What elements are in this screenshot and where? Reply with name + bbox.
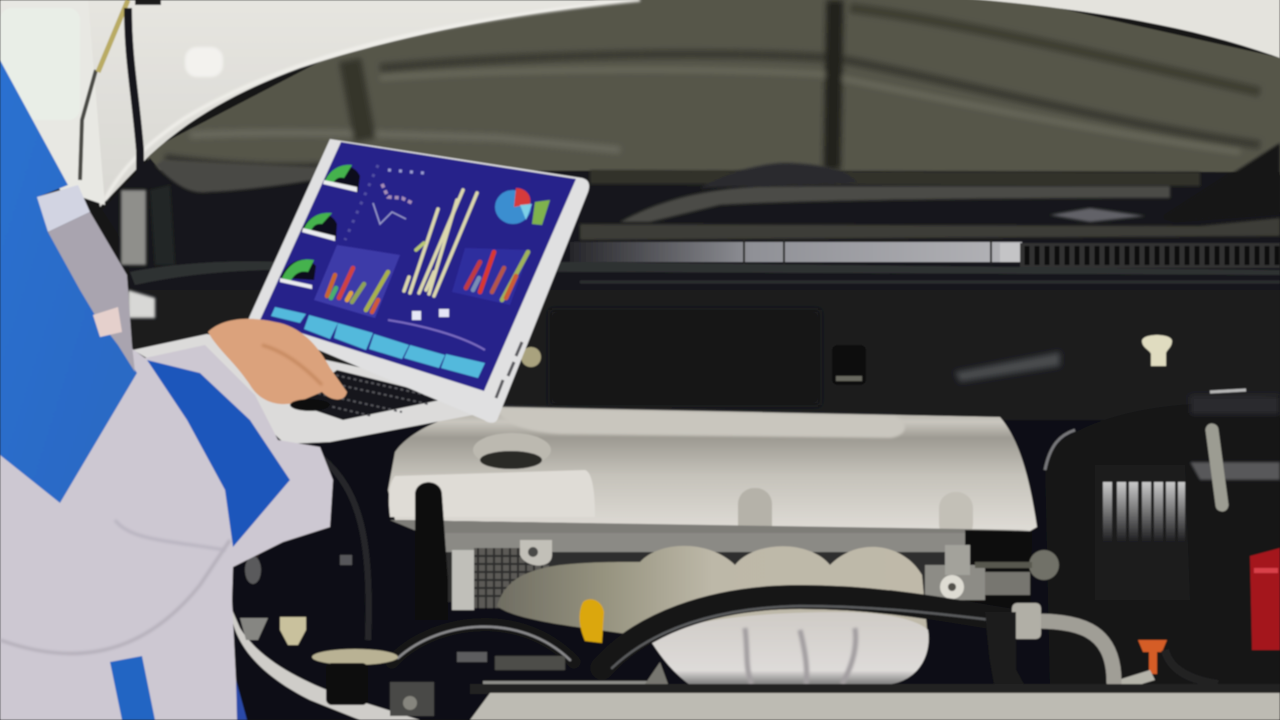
white dots	[412, 311, 421, 320]
pie chart	[495, 188, 550, 225]
mesh	[474, 548, 549, 608]
laptop keyboard deck	[133, 334, 500, 444]
right side intake assembly	[1045, 390, 1280, 690]
hand on laptop	[208, 319, 347, 404]
left white panel	[0, 8, 80, 120]
hose clamp	[1012, 603, 1041, 639]
intake pipe	[1190, 462, 1280, 480]
radiator support	[230, 605, 1280, 720]
dark lower engine bay	[230, 420, 1280, 720]
chart panel left	[314, 245, 400, 318]
left engine bay wiring	[245, 458, 369, 640]
beige connector	[280, 617, 306, 645]
light shoulder band	[37, 185, 90, 232]
intake fins	[1103, 482, 1185, 542]
oil filler cap	[473, 433, 551, 467]
chart right	[452, 248, 530, 305]
blue lower stripe	[110, 656, 155, 720]
radiator cap	[312, 649, 398, 665]
black stub on reservoir	[415, 482, 448, 620]
square hole	[832, 345, 866, 385]
windshield reflection	[140, 0, 1280, 190]
keyboard	[293, 370, 450, 420]
hood blob highlight	[185, 47, 223, 77]
mechanic in blue and grey overalls	[0, 60, 333, 720]
lavender torso and arm	[0, 340, 333, 720]
small line graphs	[345, 165, 424, 240]
hood strut and cable	[80, 0, 161, 220]
orange cap	[1138, 640, 1167, 674]
bracket	[520, 540, 552, 566]
intake manifold	[445, 533, 965, 685]
blue sleeve stripe	[147, 360, 290, 547]
yellow oil dipstick	[579, 599, 604, 643]
left white wall	[0, 0, 105, 205]
white front panel	[230, 605, 420, 720]
laptop lid	[248, 139, 589, 423]
pink sleeve reflection	[93, 307, 122, 337]
plastic clips	[1142, 335, 1172, 366]
gauges	[280, 165, 360, 289]
under-arc parts	[457, 652, 487, 662]
cyan buttons	[271, 307, 485, 378]
side ports	[496, 342, 522, 398]
cover bosses	[738, 488, 772, 548]
engine cover	[388, 407, 1037, 548]
tall white bars	[404, 190, 477, 296]
blue upper body	[0, 60, 137, 503]
black hose and metal pipe	[392, 597, 1114, 682]
firewall	[128, 290, 1280, 425]
mauve shoulder panel	[48, 212, 135, 372]
right hood edge	[960, 0, 1280, 58]
palm shadow on keyboard	[290, 399, 330, 411]
screen	[260, 142, 576, 391]
cowl, wiper and vent grille	[102, 143, 1280, 295]
throttle parts	[925, 530, 1059, 610]
white hood edge	[85, 0, 640, 207]
red battery terminal	[1250, 548, 1280, 650]
trend line	[388, 320, 485, 350]
coolant reservoir block	[389, 470, 595, 517]
lower manifold	[650, 612, 929, 685]
